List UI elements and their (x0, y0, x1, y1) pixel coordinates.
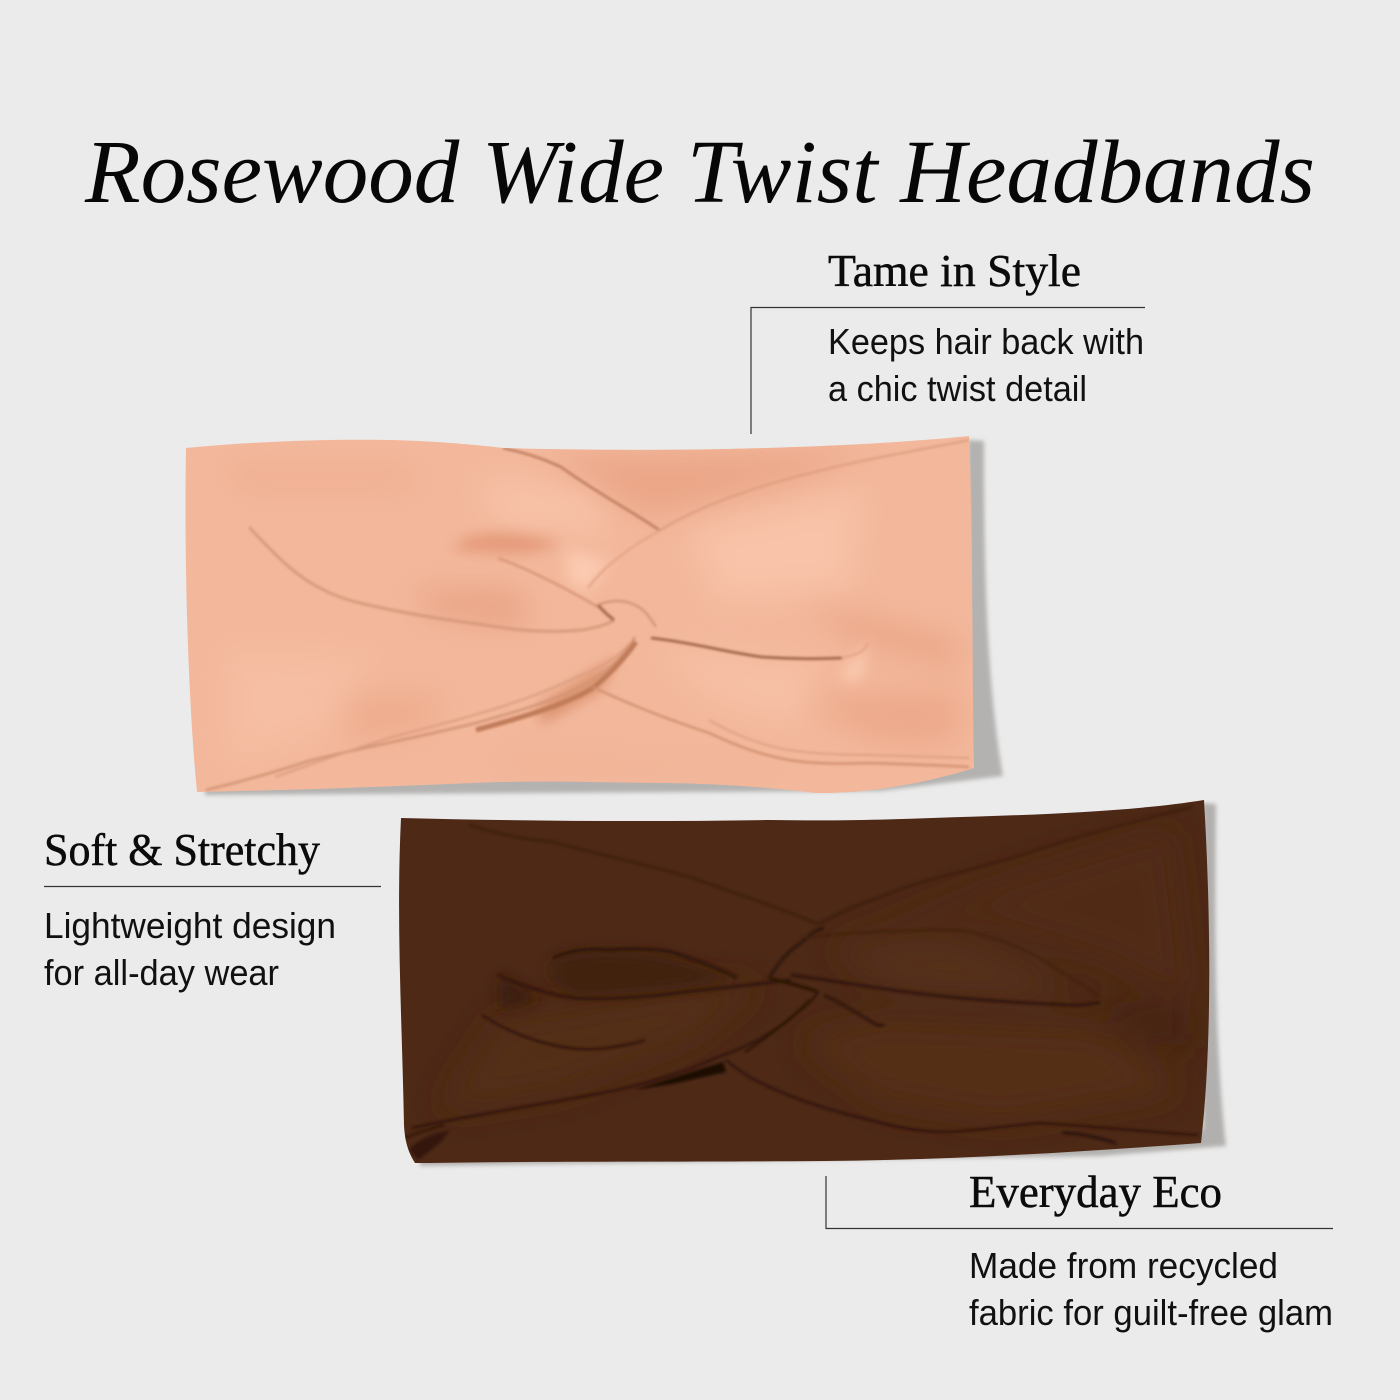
callout: Tame in Style: a chic twist detail (828, 368, 1087, 409)
peach band body (185, 436, 974, 793)
brown folds: broad shading (926, 962, 1190, 1052)
heading: Soft & Stretchy: Soft & Stretchy (44, 824, 320, 875)
callout: Everyday Eco: fabric for guilt-free glam (969, 1292, 1333, 1333)
title: Rosewood Wide Twist Headbands (84, 123, 1315, 222)
brown headband (399, 800, 1226, 1166)
callout: Tame in Style (751, 245, 1145, 434)
heading: Everyday Eco: Everyday Eco (969, 1166, 1222, 1217)
text: Soft & Stretchy description: Lightweight design (44, 905, 336, 946)
peach band shadow (205, 440, 1003, 795)
brown folds: crease lines (404, 807, 1198, 1143)
brown band body (399, 800, 1209, 1163)
peach folds: crease lines (206, 440, 969, 790)
callout: Soft & Stretchy: for all-day wear (44, 952, 279, 993)
brown fold gaps: dark openings (409, 1062, 726, 1160)
callout: Everyday Eco (826, 1166, 1333, 1333)
text: Tame in Style description: Keeps hair back with (828, 321, 1144, 362)
callout: Soft & Stretchy (44, 824, 381, 993)
text: Everyday Eco description: Made from recycled (969, 1245, 1278, 1286)
brown band shadow (420, 803, 1226, 1166)
peach folds: broad shading (354, 446, 962, 747)
heading: Tame in Style: Tame in Style (828, 245, 1081, 296)
peach headband (185, 436, 1003, 795)
